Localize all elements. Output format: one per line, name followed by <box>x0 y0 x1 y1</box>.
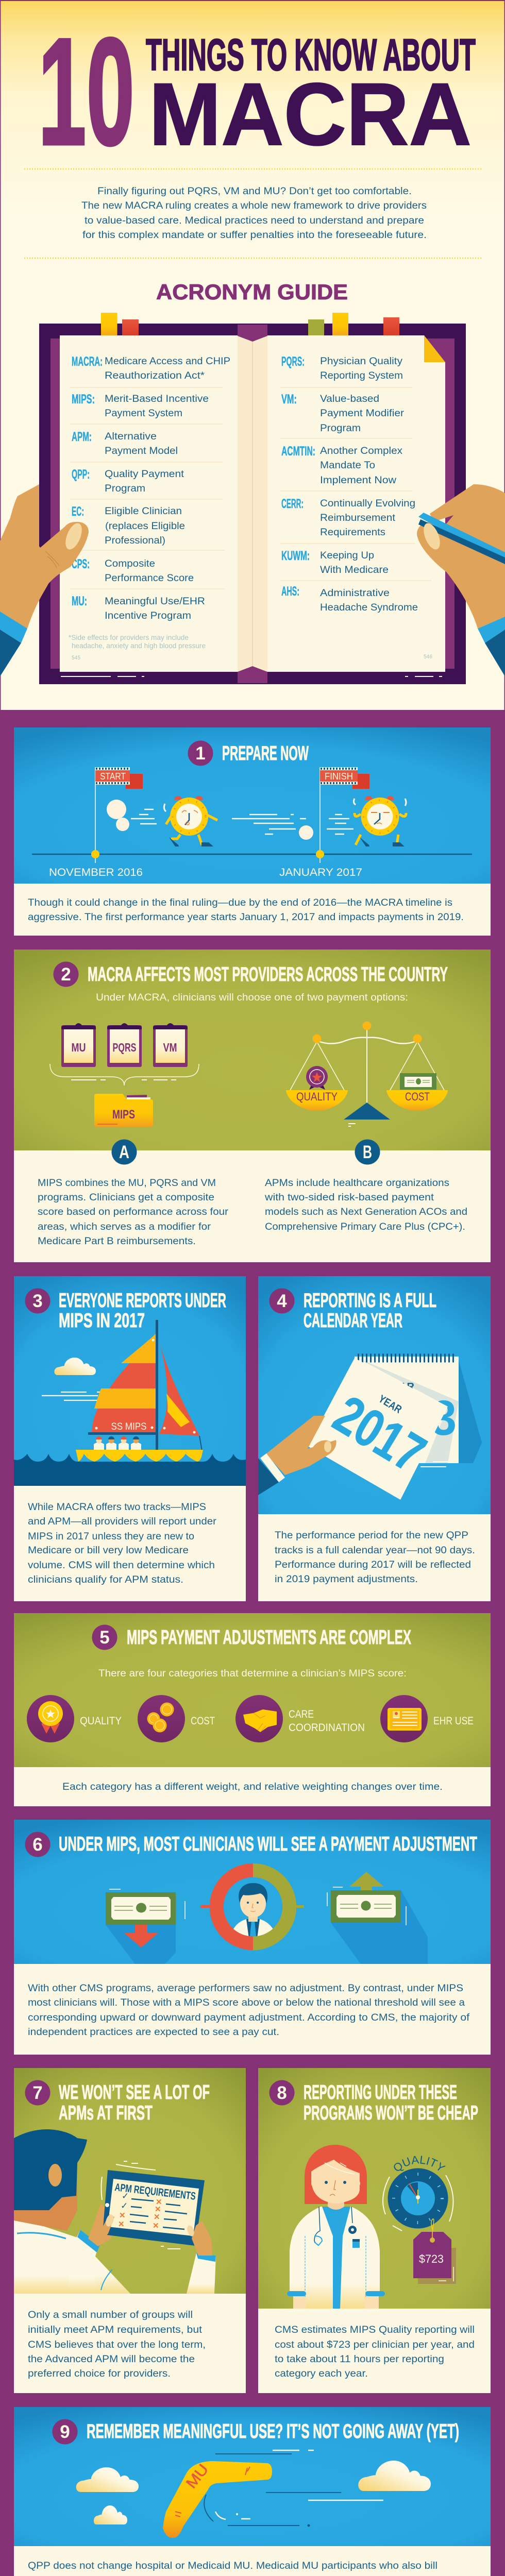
panel 4: reporting is a full calendar year <box>258 1276 491 1601</box>
acronym list: left page: EC: <box>72 504 84 519</box>
acronym list: right page: Headache Syndrome <box>320 602 418 613</box>
body text 3: and APM—all providers will report under <box>28 1516 217 1527</box>
icon: running alarm clock <box>166 796 217 846</box>
acronym list: left page: APM: <box>72 430 92 444</box>
body text 7: preferred choice for providers. <box>28 2368 171 2379</box>
acronym list: left page: Eligible Clinician <box>105 506 182 517</box>
clinician seen from behind <box>14 2129 216 2294</box>
body text B: Comprehensive Primary Care Plus (CPC+). <box>265 1222 465 1232</box>
number badge 1: 1 <box>195 743 206 764</box>
number badge 5: 5 <box>99 1628 110 1648</box>
icon: right hand with pencil <box>417 484 505 676</box>
acronym list: left page: Professional) <box>105 535 165 546</box>
panel 1: prepare now <box>14 727 491 936</box>
icon: bill with down arrow <box>106 1889 185 1947</box>
acronym list: right page: VM: <box>281 392 297 406</box>
tablet: ✕ <box>119 2211 126 2220</box>
body text 6 <box>28 1983 470 2038</box>
icon: calendar page: YEAR <box>376 1393 403 1416</box>
acronym list: right page: KUWM: <box>281 549 310 563</box>
acronym list: right page: Mandate To <box>320 460 375 471</box>
body text A <box>38 1178 229 1247</box>
body text 8 <box>275 2325 475 2379</box>
body text B: models such as Next Generation ACOs and <box>265 1207 467 1217</box>
acronym list: right page: CERR: <box>281 497 304 511</box>
acronym list: right page: Value-based <box>320 394 379 404</box>
category labels: CARE <box>289 1708 314 1720</box>
number badge 1 <box>188 741 213 766</box>
heading 4: CALENDAR YEAR <box>304 1310 402 1332</box>
subheading 5: There are four categories that determine a clinician’s MIPS score: <box>98 1668 407 1679</box>
panel 5: MIPS payment adjustments <box>14 1613 491 1806</box>
icon: dust clouds and speed lines <box>107 799 406 840</box>
body text 1: Though it could change in the final ruling—due by the end of 2016—the MACRA timeline is <box>28 897 452 908</box>
body text 7: the Advanced APM will become the <box>28 2354 195 2365</box>
icon: quality clock <box>382 2156 454 2231</box>
number badge 6: 6 <box>32 1835 43 1855</box>
scale quality vs cost <box>286 1021 448 1126</box>
clipboards MU PQRS VM <box>61 1023 188 1067</box>
timeline: JANUARY 2017 <box>279 867 362 878</box>
number badge 2: 2 <box>61 964 71 985</box>
icon: cloud <box>54 1358 96 1375</box>
folder MIPS: MIPS <box>112 1108 135 1122</box>
body text 5: Each category has a different weight, and relative weighting changes over time. <box>62 1782 443 1792</box>
body text 4 <box>275 1530 475 1585</box>
body text 3 <box>28 1502 217 1585</box>
tablet: ✓ <box>121 2201 128 2211</box>
number badge 9: 9 <box>60 2422 70 2442</box>
body text 4: tracks is a full calendar year—not 90 days. <box>275 1545 475 1556</box>
subheading 2: Under MACRA, clinicians will choose one of two payment options: <box>96 992 408 1003</box>
body text 8: cost about $723 per clinician per year, and <box>275 2340 475 2350</box>
acronym list: left page: Incentive Program <box>105 611 191 621</box>
panel 2: macra affects most providers <box>14 950 491 1262</box>
timeline <box>32 767 472 878</box>
title <box>38 6 476 177</box>
tablet: ✕ <box>118 2220 125 2229</box>
price tag: $723 <box>419 2252 444 2265</box>
heading 7: APMs AT FIRST <box>59 2102 153 2124</box>
purple background band <box>0 710 505 2576</box>
intro text: for this complex mandate or suffer penalties into the foreseeable future. <box>82 230 427 241</box>
number badge 8: 8 <box>277 2083 287 2103</box>
body text 3: volume. CMS will then determine which <box>28 1560 215 1571</box>
body text 4: Performance during 2017 will be reflected <box>275 1560 471 1570</box>
number badge 6 <box>25 1832 50 1857</box>
panel 3: everyone reports under MIPS <box>14 1276 246 1601</box>
icon: wall calendar: 3 <box>431 1391 457 1446</box>
acronym list: left page: Quality Payment <box>105 469 184 480</box>
body text 4: in 2019 payment adjustments. <box>275 1574 418 1585</box>
number badge 2 <box>54 961 78 987</box>
acronym list: right page: With Medicare <box>320 565 389 575</box>
acronym list: left page: Performance Score <box>105 573 194 584</box>
crew <box>94 1436 141 1450</box>
number badge 3 <box>25 1288 50 1314</box>
icon: left hand holding book <box>0 484 89 676</box>
wind lines <box>42 1392 102 1400</box>
acronym list: left page: MIPS: <box>72 392 95 406</box>
acronym list: left page: QPP: <box>72 467 90 482</box>
clouds <box>76 2461 431 2524</box>
heading 7: WE WON’T SEE A LOT OF <box>59 2081 210 2104</box>
panel 8: reporting won't be cheap <box>258 2068 491 2393</box>
acronym list: left page: Program <box>105 483 145 494</box>
acronym list: left page: Merit-Based Incentive <box>105 394 209 404</box>
body text 3: MIPS in 2017 unless they are new to <box>28 1531 194 1542</box>
category labels: EHR USE <box>433 1715 474 1727</box>
tablet: ✕ <box>155 2205 161 2214</box>
icon: bill with up arrow <box>327 1872 406 1925</box>
flag: start: START <box>100 771 126 782</box>
body text A: MIPS combines the MU, PQRS and VM <box>38 1178 216 1189</box>
acronym list: left page: Medicare Access and CHIP <box>105 356 230 367</box>
clipboards MU PQRS VM: PQRS <box>112 1041 136 1054</box>
cost bill <box>400 1073 436 1090</box>
acronym list: right page: Continually Evolving <box>320 498 415 509</box>
folder MIPS <box>94 1094 153 1127</box>
category labels: QUALITY <box>80 1715 122 1727</box>
number badge 3: 3 <box>32 1291 43 1311</box>
tablet: ✕ <box>154 2213 160 2222</box>
number badge 7 <box>25 2080 50 2105</box>
acronym list: left page: headache, anxiety and high blood pressure <box>72 641 206 650</box>
icon: handshake <box>235 1695 283 1742</box>
donut with clinician <box>200 1870 304 1943</box>
category labels: COST <box>191 1715 215 1727</box>
icon: calendar page: 2017 <box>324 1384 435 1484</box>
icon: hand holding page <box>258 1416 336 1495</box>
tablet: ✕ <box>156 2198 162 2207</box>
icon: wall calendar: AR <box>399 1381 414 1393</box>
heading: acronym guide: ACRONYM GUIDE <box>156 280 348 304</box>
intro text: The new MACRA ruling creates a whole new framework to drive providers <box>81 200 427 211</box>
icon: EHR card <box>380 1695 428 1742</box>
acronym list: right page <box>280 354 432 660</box>
icon: quality badge <box>27 1695 74 1742</box>
acronym list: right page: AHS: <box>281 584 299 599</box>
number badge 9 <box>53 2419 77 2444</box>
acronym list: right page: Reporting System <box>320 370 403 381</box>
acronym list: left page: (replaces Eligible <box>105 521 185 532</box>
body text A: Medicare Part B reimbursements. <box>38 1236 196 1247</box>
body text 6: independent practices are expected to see a pay cut. <box>28 2027 279 2038</box>
body text 9 <box>28 2561 437 2576</box>
body text 3: clinicians qualify for APM status. <box>28 1574 183 1585</box>
body text 8: to take about 11 hours per reporting <box>275 2354 444 2365</box>
acronym list: right page: Payment Modifier <box>320 408 405 419</box>
body text A: areas, which serves as a modifier for <box>38 1222 211 1232</box>
body text 7 <box>28 2310 206 2379</box>
acronym list: right page: Reimbursement <box>320 513 396 523</box>
body text 7: CMS believes that over the long term, <box>28 2340 206 2350</box>
heading 7 <box>59 2081 210 2124</box>
heading 3 <box>59 1290 226 1332</box>
title: MACRA <box>149 65 472 164</box>
acronym list: right page: 546 <box>424 654 432 660</box>
acronym list: left page: MU: <box>72 594 87 608</box>
badges A and B <box>111 1140 380 1164</box>
sailboat: SS MIPS <box>111 1421 146 1432</box>
panel 7: we won't see a lot of APMs <box>14 2068 246 2393</box>
body text 3: While MACRA offers two tracks—MIPS <box>28 1502 206 1513</box>
title: 10 <box>38 6 134 177</box>
panel 9: remember meaningful use <box>14 2407 491 2576</box>
icon: tired alarm clock <box>355 796 406 846</box>
panel 6: under MIPS most clinicians <box>14 1820 491 2055</box>
intro text: Finally figuring out PQRS, VM and MU? Don’t get too comfortable. <box>97 186 412 197</box>
body text A: score based on performance across four <box>38 1207 229 1217</box>
female clinician <box>287 2145 385 2309</box>
icon: wall calendar <box>355 1357 482 1467</box>
acronym list: left page: *Side effects for providers may include <box>69 633 189 641</box>
category labels <box>80 1708 474 1734</box>
book illustration <box>39 313 466 684</box>
acronym list: left page: MACRA: <box>72 354 103 369</box>
badges A and B: B <box>363 1142 372 1162</box>
badges A and B: A <box>119 1142 129 1162</box>
scale quality vs cost: COST <box>405 1090 430 1103</box>
shadows <box>106 1890 428 1964</box>
acronym list: left page: Payment Model <box>105 446 178 456</box>
flag: finish: FINISH <box>325 771 353 782</box>
sea <box>14 1454 246 1486</box>
motion lines <box>204 2450 383 2527</box>
heading 3: MIPS IN 2017 <box>59 1310 145 1332</box>
quality ribbon <box>306 1066 328 1090</box>
body text 3: Medicare or bill very low Medicare <box>28 1545 189 1556</box>
intro text <box>24 169 481 258</box>
intro text: to value-based care. Medical practices need to understand and prepare <box>85 215 424 226</box>
acronym list: left page: Meaningful Use/EHR <box>105 596 205 607</box>
body text 1: aggressive. The first performance year starts January 1, 2017 and impacts payments in 2019. <box>28 912 464 923</box>
clinician portrait <box>233 1883 273 1936</box>
icon: calendar page <box>308 1358 448 1500</box>
category labels: COORDINATION <box>289 1722 365 1734</box>
number badge 4: 4 <box>277 1291 287 1311</box>
number badge 7: 7 <box>32 2083 43 2103</box>
body text 6: corresponding upward or downward payment adjustment. According to CMS, the majority of <box>28 2012 470 2023</box>
tablet <box>88 2170 212 2256</box>
heading 3: EVERYONE REPORTS UNDER <box>59 1290 226 1312</box>
acronym list: right page: Administrative <box>320 588 390 599</box>
heading 8 <box>304 2081 478 2124</box>
price tag <box>413 2219 456 2284</box>
acronym list: left page <box>69 354 230 661</box>
boomerang <box>163 2461 272 2538</box>
tablet: ✕ <box>153 2222 159 2230</box>
sailboat <box>76 1320 203 1462</box>
body text 4: The performance period for the new QPP <box>275 1530 468 1541</box>
timeline: NOVEMBER 2016 <box>49 867 143 878</box>
flag: finish <box>320 767 369 789</box>
body text 6: With other CMS programs, average performers saw no adjustment. By contrast, under MIPS <box>28 1983 463 1994</box>
body text 8: CMS estimates MIPS Quality reporting will <box>275 2325 475 2335</box>
tablet: ✓ <box>122 2191 129 2201</box>
body text 7: Only a small number of groups will <box>28 2310 193 2320</box>
acronym list: right page: ACMTIN: <box>281 444 315 459</box>
acronym list: left page: 545 <box>72 655 80 661</box>
body text A: programs. Clinicians get a composite <box>38 1192 214 1203</box>
acronym list: right page: Another Complex <box>320 446 403 456</box>
acronym list: left page: Alternative <box>105 431 157 442</box>
clipboards MU PQRS VM: MU <box>71 1041 86 1054</box>
acronym list: right page: Program <box>320 423 361 434</box>
icon: quality clock: QUALITY <box>394 2156 446 2171</box>
motion marks <box>101 2161 180 2249</box>
flag: start <box>95 767 143 789</box>
clipboards MU PQRS VM: VM <box>163 1041 177 1054</box>
acronym list: right page: Physician Quality <box>320 356 403 367</box>
brace <box>50 1064 199 1086</box>
number badge 8 <box>269 2080 295 2105</box>
heading 4 <box>304 1290 436 1332</box>
acronym list: right page: Requirements <box>320 527 385 538</box>
body text 8: category each year. <box>275 2368 368 2379</box>
acronym list: left page: CPS: <box>72 557 90 571</box>
heading 1: PREPARE NOW <box>222 742 309 765</box>
icon: cost coins <box>138 1695 185 1742</box>
acronym list: right page: Implement Now <box>320 475 396 486</box>
body text 7: initially meet APM requirements, but <box>28 2325 203 2335</box>
body text 6: most clinicians will. Those with a MIPS score above or below the national threshold will see a <box>28 1997 465 2008</box>
scale quality vs cost: QUALITY <box>296 1090 338 1103</box>
body text 1 <box>28 897 464 923</box>
acronym list: right page: Keeping Up <box>320 550 374 561</box>
body text B: APMs include healthcare organizations <box>265 1178 449 1189</box>
body text B <box>264 1178 467 1232</box>
body text B: with two-sided risk-based payment <box>264 1192 434 1203</box>
acronym list: right page: PQRS: <box>281 354 305 369</box>
acronym list: left page: Composite <box>105 558 155 569</box>
acronym list: left page: Payment System <box>105 408 182 419</box>
number badge 5 <box>92 1625 117 1650</box>
boomerang: MU <box>183 2461 212 2492</box>
tablet: APM REQUIREMENTS <box>114 2181 196 2202</box>
number badge 4 <box>269 1288 295 1314</box>
acronym list: left page: Reauthorization Act* <box>105 370 205 381</box>
body text 9: QPP does not change hospital or Medicaid MU. Medicaid MU participants who also bill <box>28 2561 437 2571</box>
